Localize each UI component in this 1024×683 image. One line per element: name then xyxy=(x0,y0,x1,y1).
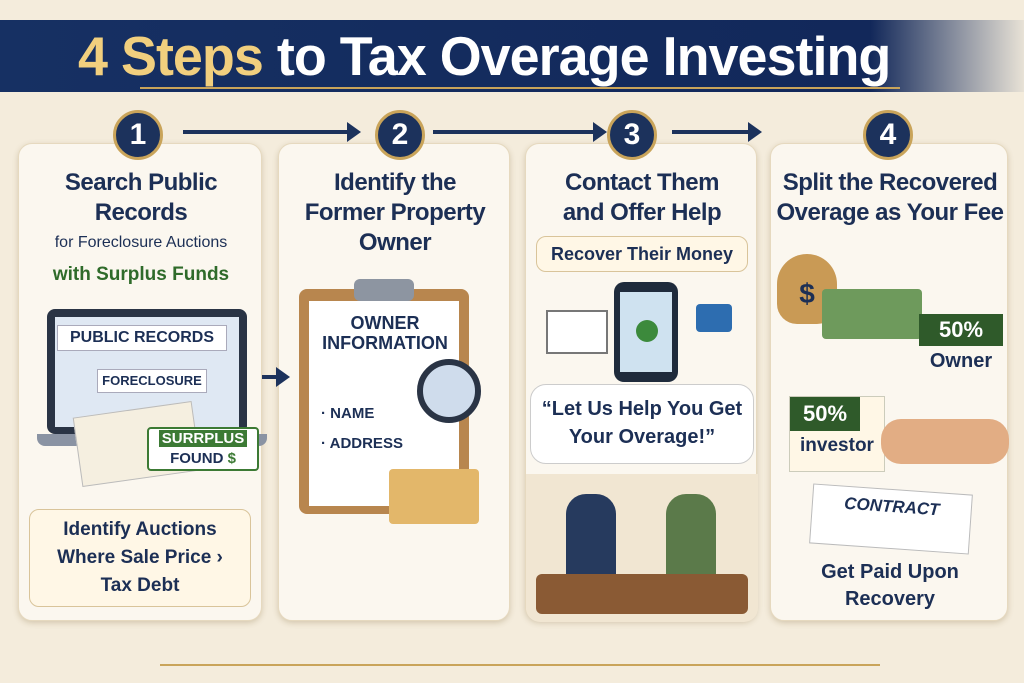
50% owner: 50% xyxy=(939,317,983,342)
laptop illustration: FORECLOSURE xyxy=(102,373,202,388)
heading 2 xyxy=(305,169,486,256)
phone and envelope icons xyxy=(546,282,732,382)
heading 3: Contact Them xyxy=(565,169,719,196)
panel: step 1 xyxy=(18,143,262,621)
50% investor xyxy=(789,396,885,472)
50% investor: investor xyxy=(800,435,874,456)
laptop illustration: FOUND $ xyxy=(170,450,236,467)
callout 1: Where Sale Price › xyxy=(57,547,223,568)
heading 2: Former Property xyxy=(305,199,485,226)
heading 1: Search Public xyxy=(65,169,217,196)
heading 4: Overage as Your Fee xyxy=(776,199,1004,226)
panel: step 2 xyxy=(278,143,510,621)
heading 3 xyxy=(563,169,721,226)
clipboard illustration: · NAME xyxy=(321,405,374,422)
get paid text: Recovery xyxy=(845,588,935,610)
step number 2: 2 xyxy=(392,118,408,151)
heading 2: Owner xyxy=(359,229,431,256)
50% investor: 50% xyxy=(803,401,847,426)
panel: step 4 xyxy=(770,143,1008,621)
heading 1 xyxy=(65,169,217,226)
step number 1 xyxy=(113,110,163,160)
laptop illustration xyxy=(37,309,267,487)
laptop illustration: SURRPLUS xyxy=(162,430,244,447)
callout 1: Identify Auctions xyxy=(63,519,217,540)
step number 3 xyxy=(607,110,657,160)
50% owner xyxy=(919,314,1003,372)
subtext green: with Surplus Funds xyxy=(53,264,229,285)
heading 1: Records xyxy=(95,199,187,226)
pill recover money: Recover Their Money xyxy=(551,244,733,264)
panel: step 3 xyxy=(525,143,757,621)
speech bubble xyxy=(530,384,754,464)
clipboard illustration: · ADDRESS xyxy=(321,435,403,452)
get paid text xyxy=(821,561,959,610)
get paid text: Get Paid Upon xyxy=(821,561,959,583)
contract: CONTRACT xyxy=(844,494,940,519)
contract xyxy=(809,483,973,555)
speech bubble: “Let Us Help You Get xyxy=(542,398,742,420)
clipboard illustration xyxy=(299,279,481,524)
heading 3: and Offer Help xyxy=(563,199,721,226)
step number 1: 1 xyxy=(130,118,146,151)
arrow 1 to 2 small xyxy=(262,375,280,379)
arrow 3-4 xyxy=(672,130,752,134)
heading 4 xyxy=(776,169,1004,226)
clipboard illustration: OWNER xyxy=(350,313,420,333)
title banner xyxy=(0,20,1024,92)
step number 3: 3 xyxy=(624,118,640,151)
step number 4 xyxy=(863,110,913,160)
speech bubble: Your Overage!” xyxy=(569,426,715,448)
heading 4: Split the Recovered xyxy=(783,169,997,196)
step number 4: 4 xyxy=(880,118,896,151)
pill recover money xyxy=(536,236,748,272)
meeting illustration xyxy=(526,474,758,622)
title: 4 Steps to Tax Overage Investing xyxy=(78,25,890,87)
subtext 1: for Foreclosure Auctions xyxy=(55,234,227,251)
callout 1: Tax Debt xyxy=(101,575,179,596)
clipboard illustration: INFORMATION xyxy=(322,333,448,353)
step number 2 xyxy=(375,110,425,160)
callout 1 xyxy=(29,509,251,607)
laptop illustration: PUBLIC RECORDS xyxy=(70,329,214,346)
arrow 2-3 xyxy=(433,130,597,134)
handshake xyxy=(881,419,1009,464)
50% owner: Owner xyxy=(930,350,992,372)
money illustration xyxy=(777,254,922,339)
arrow 1-2 xyxy=(183,130,351,134)
heading 2: Identify the xyxy=(334,169,456,196)
money illustration: $ xyxy=(799,278,815,309)
